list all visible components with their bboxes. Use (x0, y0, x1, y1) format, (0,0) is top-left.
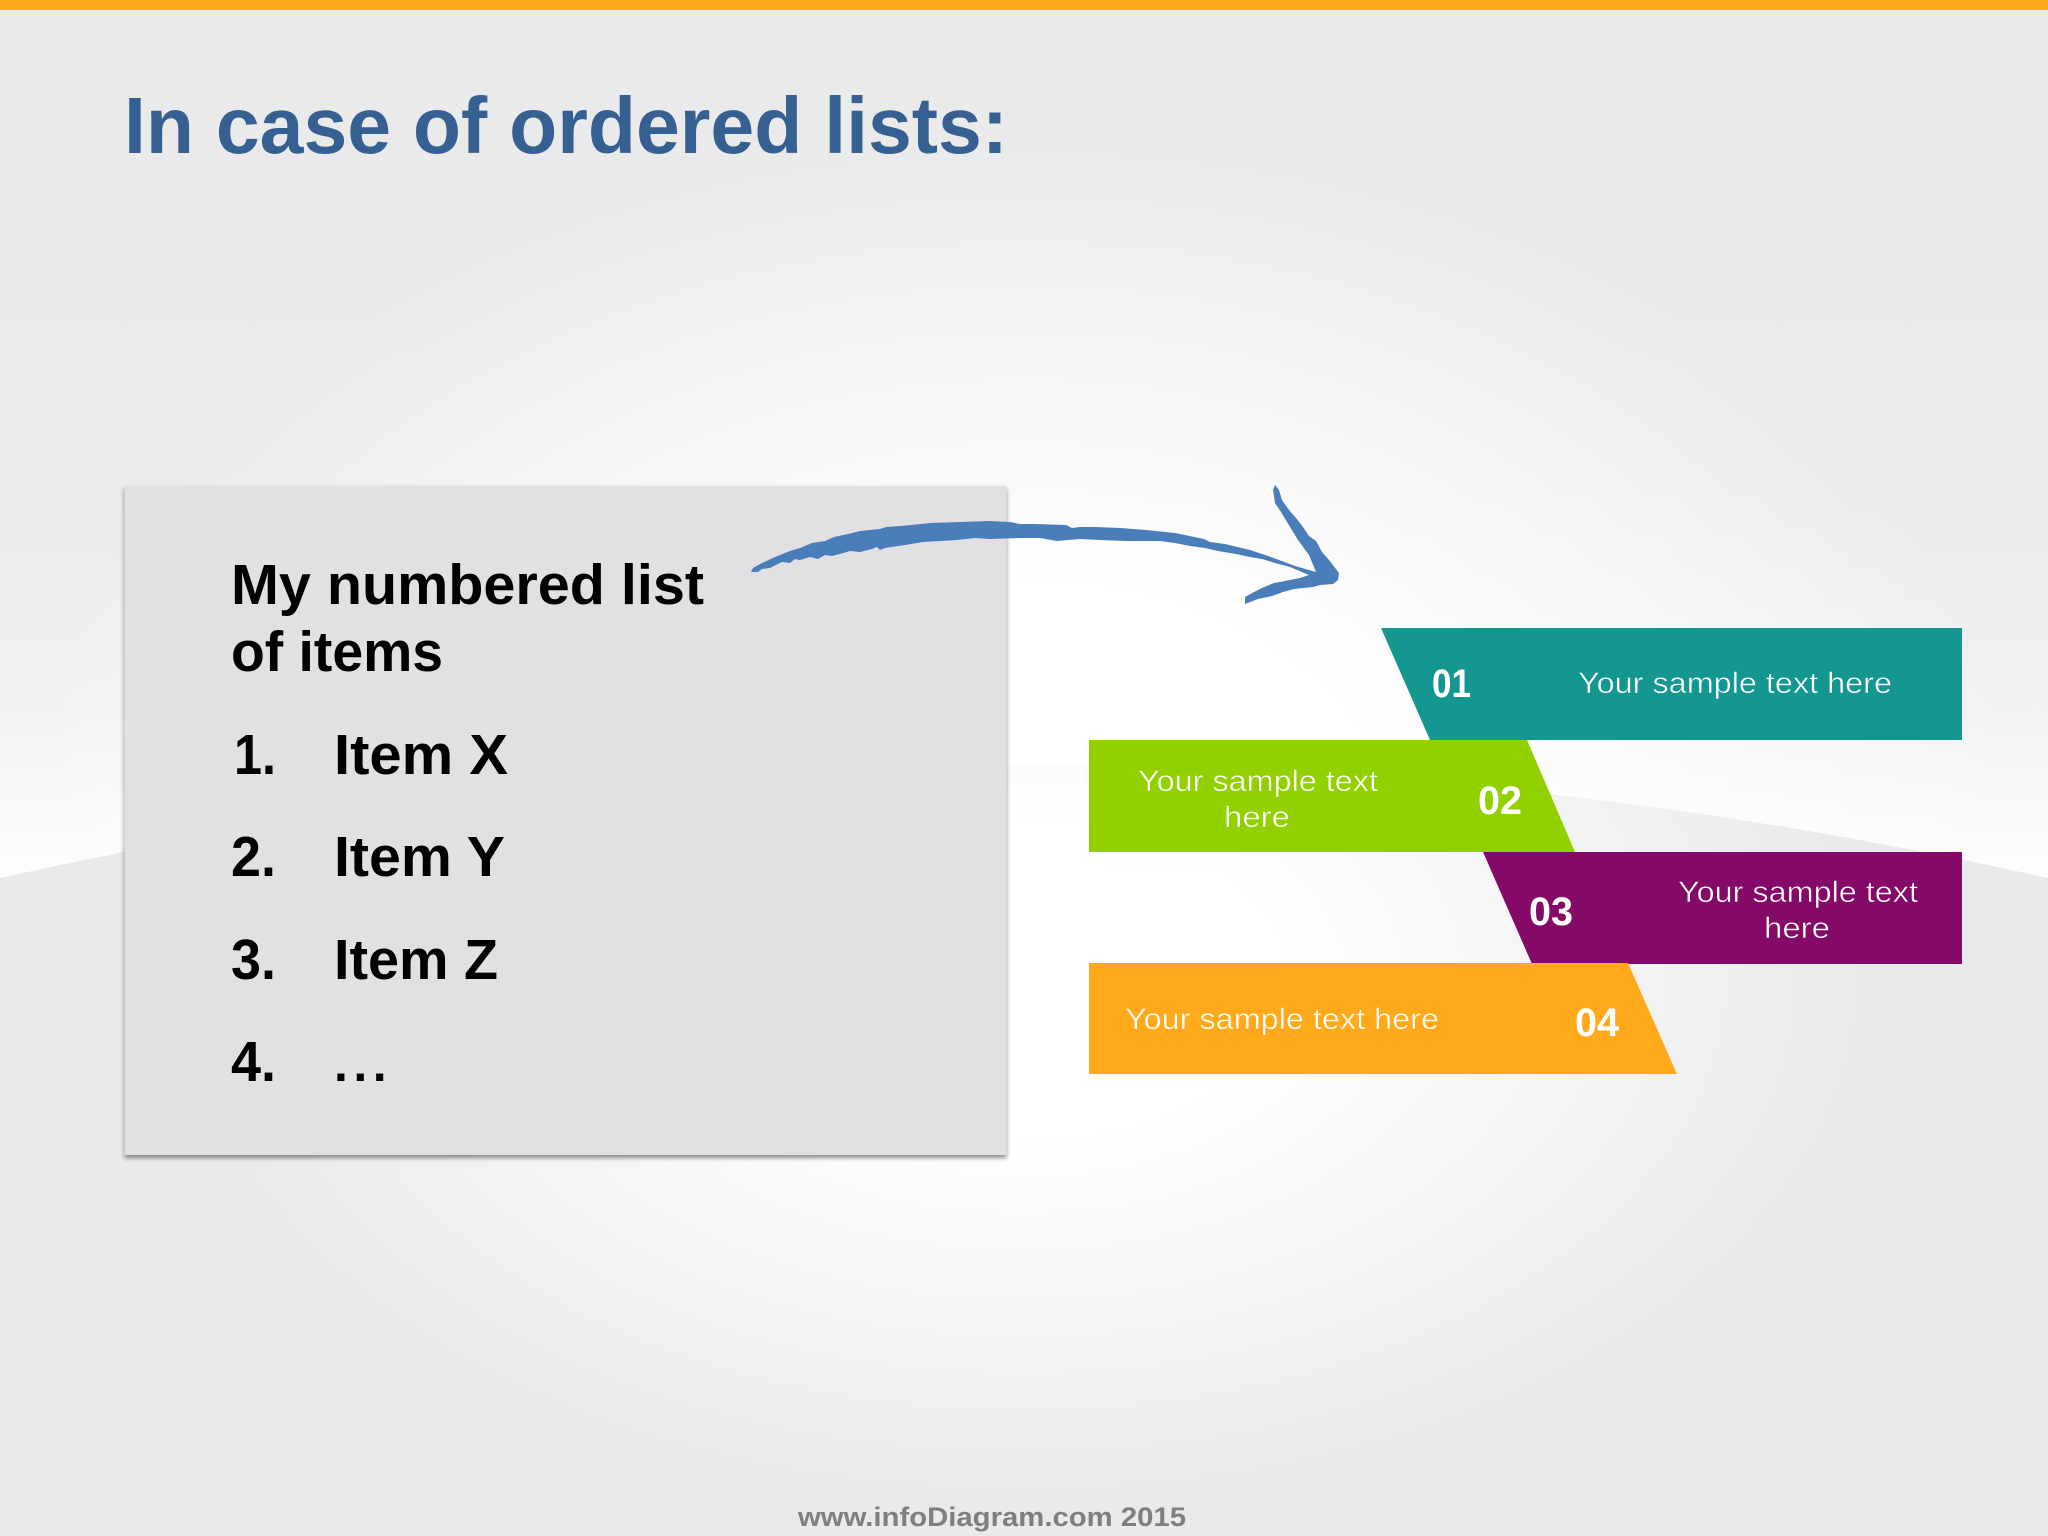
ribbon 04: orange (1089, 963, 1677, 1074)
list item 2: Item Y (334, 825, 505, 889)
ribbon 01: teal: Your sample text here (1578, 667, 1892, 700)
top accent bar (0, 0, 2048, 10)
ribbon 04: orange: Your sample text here (1125, 1003, 1439, 1036)
ribbon 01: teal: 01 (1432, 662, 1471, 706)
list item 4 (231, 1030, 392, 1094)
panel background (124, 486, 1006, 1155)
list item 2 (231, 825, 505, 889)
list item 4: ... (334, 1036, 392, 1092)
ribbon 03: purple (1483, 852, 1962, 964)
panel: numbered list (124, 486, 1006, 1155)
ribbon 02: green: here (1224, 801, 1290, 834)
list item 4: 4. (231, 1030, 276, 1094)
ribbon 03: purple: 03 (1529, 890, 1573, 934)
list heading: My numbered list (231, 553, 704, 617)
title: In case of ordered lists: (124, 81, 1008, 170)
list item 1 (234, 723, 508, 787)
list item 1: Item X (334, 723, 508, 787)
arrow: hand-drawn blue arrow from list to ribbons (751, 485, 1339, 604)
list heading: of items (231, 620, 443, 684)
list item 3 (231, 928, 498, 992)
ribbon 03: purple: Your sample text (1678, 876, 1919, 909)
list heading (231, 553, 704, 684)
footer credit: www.infoDiagram.com 2015 (797, 1502, 1186, 1532)
ribbon 02: green: 02 (1478, 779, 1522, 823)
list item 3: 3. (231, 928, 276, 992)
ribbon list (1089, 628, 1962, 1074)
list item 3: Item Z (334, 928, 498, 992)
ribbon 04: orange: 04 (1575, 1001, 1620, 1045)
list item 1: 1. (234, 723, 276, 787)
ribbon 02: green (1089, 740, 1575, 852)
ribbon 03: purple: here (1764, 912, 1830, 945)
ribbon 02: green: Your sample text (1138, 765, 1379, 798)
list item 2: 2. (231, 825, 276, 889)
ribbon 01: teal (1381, 628, 1962, 740)
